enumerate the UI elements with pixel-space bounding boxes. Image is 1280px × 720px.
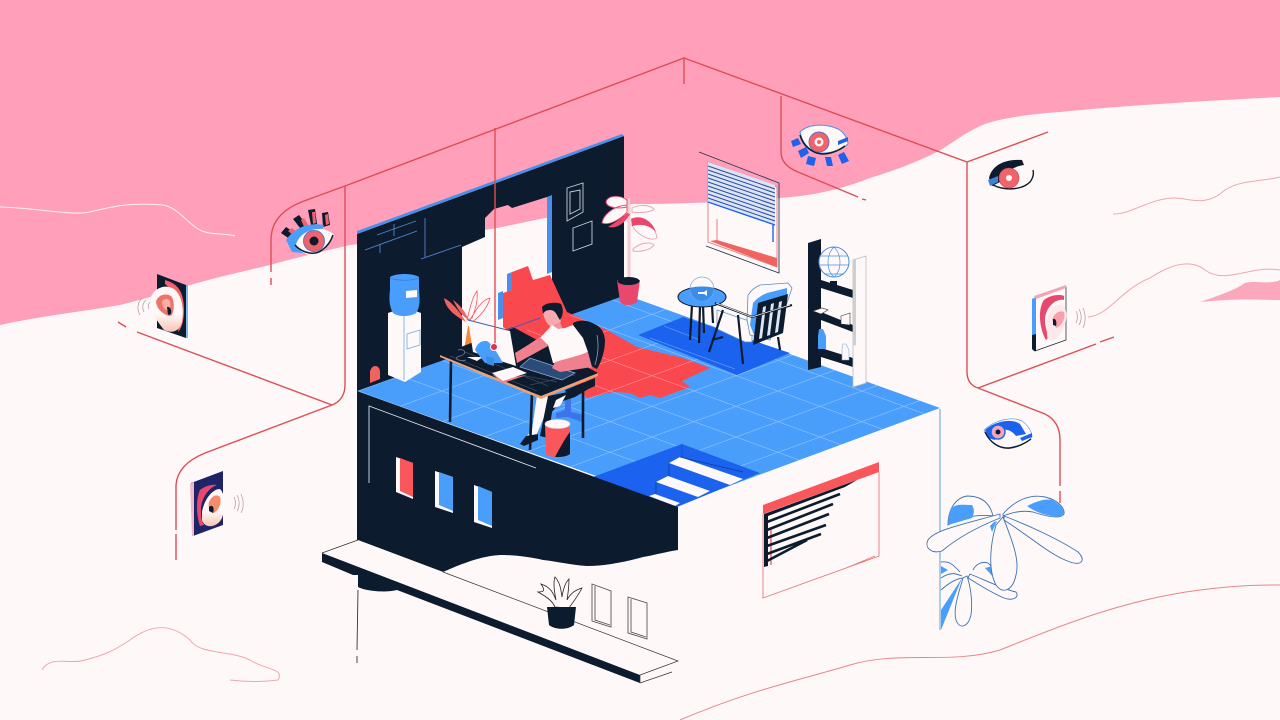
wall sketch lines [365,218,461,259]
blue lid [985,421,1026,440]
papers [492,374,527,383]
armchair [709,283,792,364]
blue rug [638,317,790,375]
hair [542,303,563,320]
small red arch [370,366,380,383]
icon: blue eye, lower right [984,419,1032,448]
iris [809,132,829,152]
ledge [322,540,678,683]
window sill [710,240,777,267]
garage window [763,462,879,598]
office chair back [556,321,605,422]
iris [991,425,1005,439]
fishbowl [690,277,714,301]
contour line: top right cloud [1113,177,1280,214]
eye outer [800,125,848,153]
eye dark lid [989,160,1024,186]
chair seat and base [565,378,595,398]
chair seat [717,310,752,342]
right wall corner line [939,409,941,630]
desk [440,327,598,450]
shirt [540,325,588,365]
front lower wall [357,391,678,572]
contour line: left cloud on pink [0,204,235,236]
contour line: right hill [1088,264,1280,317]
bin [545,420,570,457]
window: blue right [474,485,492,528]
back wall [357,134,624,393]
right leaf [1004,516,1082,563]
chair slats [753,294,788,345]
eye white [296,229,334,255]
shelf items [813,308,850,325]
desk edge [440,355,598,399]
contour line: bottom right hill [680,585,1280,720]
eye blob [286,224,324,254]
red wireframe house outline [118,58,1114,560]
iris [999,168,1019,188]
icon: ear on panel, right [1032,285,1085,351]
pink background wave [0,0,1280,325]
shelf side panel [853,256,866,387]
left arm [515,337,548,363]
arm rest and legs [709,303,792,364]
door jamb [547,195,552,274]
right arm [552,352,592,372]
chair back cushion [747,283,792,340]
ear [202,489,224,526]
keyboard [520,358,575,380]
well edge shadow [681,444,683,457]
window: red [396,457,413,499]
icon: eye with lashes, left [281,209,334,255]
iris [304,230,324,252]
window with blinds [699,152,779,273]
monitor blob [475,341,503,363]
palm trees [927,496,1082,630]
icon: ear on panel, lower left [190,471,243,536]
blinds slats [708,162,775,225]
ear [150,287,183,332]
monitor wire marker [490,344,498,350]
wall top edge [357,134,624,234]
sound waves [138,298,150,315]
icon: water cooler [388,274,421,382]
head [543,308,561,328]
monitor [468,318,540,366]
window: blue left [435,471,453,513]
icon: potted plant [602,196,657,305]
eye outer [984,419,1032,448]
ear [1047,305,1066,340]
floor [357,295,940,505]
upper left leaf [948,496,993,525]
contour line: bottom left cloud [42,628,279,682]
upper right leaf [1003,496,1064,517]
icon: ear on panel, left [138,274,188,338]
left leaf [927,514,1000,552]
stair well [593,444,760,507]
window dark blinds [764,480,857,567]
picture frames [567,183,592,251]
bookshelf [808,239,866,387]
desk top grooves [450,352,575,391]
lashes [281,209,330,244]
lashes [791,138,849,166]
icon: orange vase with leaves [444,291,490,350]
red carpet [498,266,710,398]
window red awning [763,462,879,514]
plant pot [617,280,640,305]
down leaf [991,517,1017,590]
globe [819,247,849,285]
person torso [515,303,592,372]
stair treads [669,457,743,485]
pink patch on right hill [1200,280,1280,302]
eye bands [838,137,848,145]
icon: potted agave [538,577,582,629]
vertical red line to marker [494,128,496,346]
sound waves [1076,308,1085,328]
desk top [440,327,598,396]
icon: eye, top right [988,160,1034,189]
eye white [990,166,1034,188]
person legs [520,380,595,446]
icon: eye with lashes, top [791,125,849,166]
stair riser lines [656,457,743,494]
ledge windows [592,584,647,639]
side table with fishbowl [678,277,726,343]
small palm [941,562,1017,630]
ledge underside [322,553,640,683]
cooler bottle [389,274,420,316]
wall sketch lines [369,406,536,483]
desk legs [450,360,583,450]
floor grid [357,295,940,505]
sound waves [234,494,243,513]
